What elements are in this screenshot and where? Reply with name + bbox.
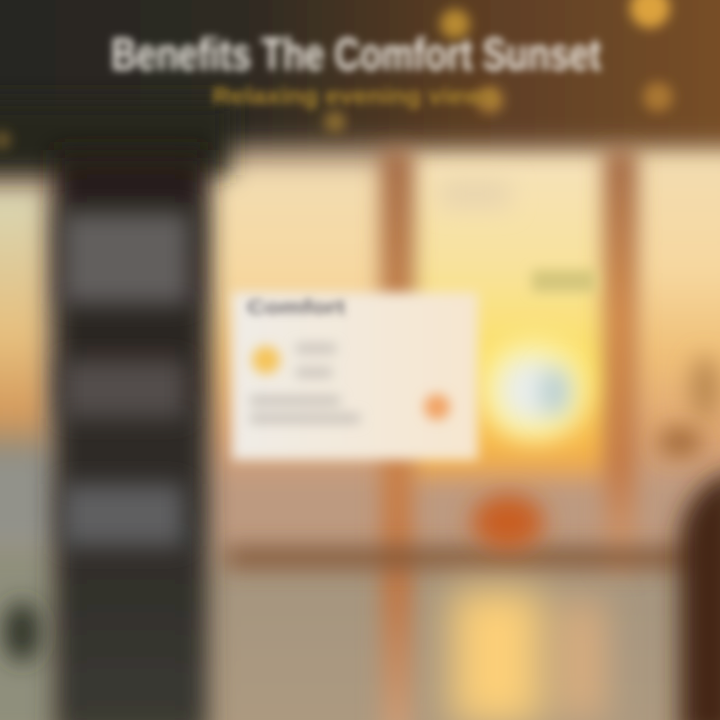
faint window text xyxy=(440,180,510,208)
sun glow xyxy=(481,338,589,442)
sidebar card 3 xyxy=(62,484,184,546)
green label on the window xyxy=(532,270,596,292)
card icon: sun xyxy=(252,346,280,374)
card icon: orange marker xyxy=(424,394,450,420)
dark plant at bottom left xyxy=(4,602,40,662)
subtitle: Relaxing evening views xyxy=(212,83,498,110)
left dark header extension xyxy=(0,100,230,175)
card text lines xyxy=(250,344,360,423)
card heading: Comfort xyxy=(247,297,345,319)
orange window pillars xyxy=(383,150,634,720)
sidebar card 1 xyxy=(62,212,190,304)
bottom horizon band xyxy=(225,548,720,568)
sidebar card 2 xyxy=(62,360,186,418)
dark sidebar column xyxy=(54,150,208,720)
bokeh lights xyxy=(0,0,673,149)
dark plant silhouette at right xyxy=(472,356,720,720)
central white card xyxy=(232,292,478,460)
bright floor reflection xyxy=(452,590,601,720)
top dark band xyxy=(0,0,720,145)
